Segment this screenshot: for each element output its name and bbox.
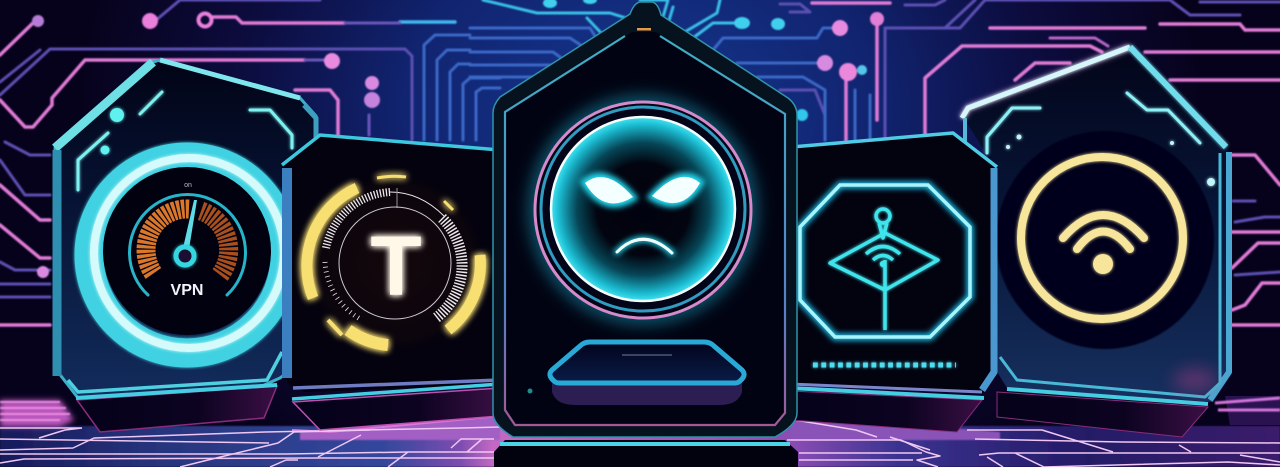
inner panel	[505, 32, 785, 425]
yellow arcs	[307, 176, 480, 345]
card body 4	[780, 133, 997, 392]
frown	[617, 239, 672, 253]
status dot	[528, 388, 532, 394]
glowing circuit floor	[0, 396, 1280, 467]
circuit nodes	[32, 0, 884, 278]
gauge orange ticks	[146, 209, 189, 273]
card edges	[282, 135, 500, 388]
card body 5	[962, 47, 1232, 402]
VPN label: VPN	[171, 282, 203, 299]
corner circuits	[987, 93, 1200, 153]
card edges	[962, 47, 1229, 400]
card body 1	[55, 60, 316, 398]
glowing dots	[100, 108, 124, 154]
card edges	[780, 133, 997, 392]
small gauge label: on	[184, 182, 192, 189]
gauge needle	[183, 200, 197, 249]
panel: VPN speed gauge	[55, 60, 316, 432]
base plinth	[790, 391, 982, 432]
base plinth	[997, 392, 1208, 437]
round face	[528, 95, 758, 325]
gauge hub	[176, 247, 194, 265]
plinth cyan rim	[76, 385, 277, 398]
octagon sign	[800, 185, 970, 337]
panel: T timer dial	[282, 135, 500, 430]
speed gauge dial	[89, 157, 285, 353]
dial	[303, 171, 487, 355]
orange indicator	[637, 28, 651, 30]
tick rings	[325, 188, 462, 320]
antenna icon	[830, 209, 938, 330]
floor pink glow bands	[0, 396, 1280, 440]
gauge arc	[130, 195, 246, 295]
plinth cyan rim	[790, 388, 984, 398]
card corner circuits	[78, 92, 292, 190]
panel: sad face device	[493, 2, 798, 467]
signal dots	[813, 362, 956, 368]
tray	[550, 342, 744, 405]
center pedestal	[494, 440, 798, 467]
panel: antenna octagon	[780, 133, 997, 432]
base plinth	[77, 386, 277, 432]
corner pink glow	[1173, 368, 1217, 392]
wifi dial	[996, 131, 1214, 349]
card body center	[493, 2, 797, 437]
pedestal cyan rim	[500, 442, 790, 446]
circuit board traces	[0, 0, 1280, 325]
wifi symbol	[1063, 215, 1144, 274]
panel: wifi ring	[962, 47, 1232, 437]
plinth cyan rim	[1007, 389, 1208, 404]
inner outline	[505, 36, 785, 425]
card body 2	[282, 135, 500, 392]
floor trace lines	[0, 420, 1280, 467]
plinth cyan rim	[292, 384, 500, 399]
glowing dots	[1006, 134, 1215, 186]
glowing T: T	[370, 219, 422, 313]
angry eyes	[583, 175, 702, 205]
card bevel	[55, 60, 316, 392]
base plinth	[293, 388, 500, 430]
